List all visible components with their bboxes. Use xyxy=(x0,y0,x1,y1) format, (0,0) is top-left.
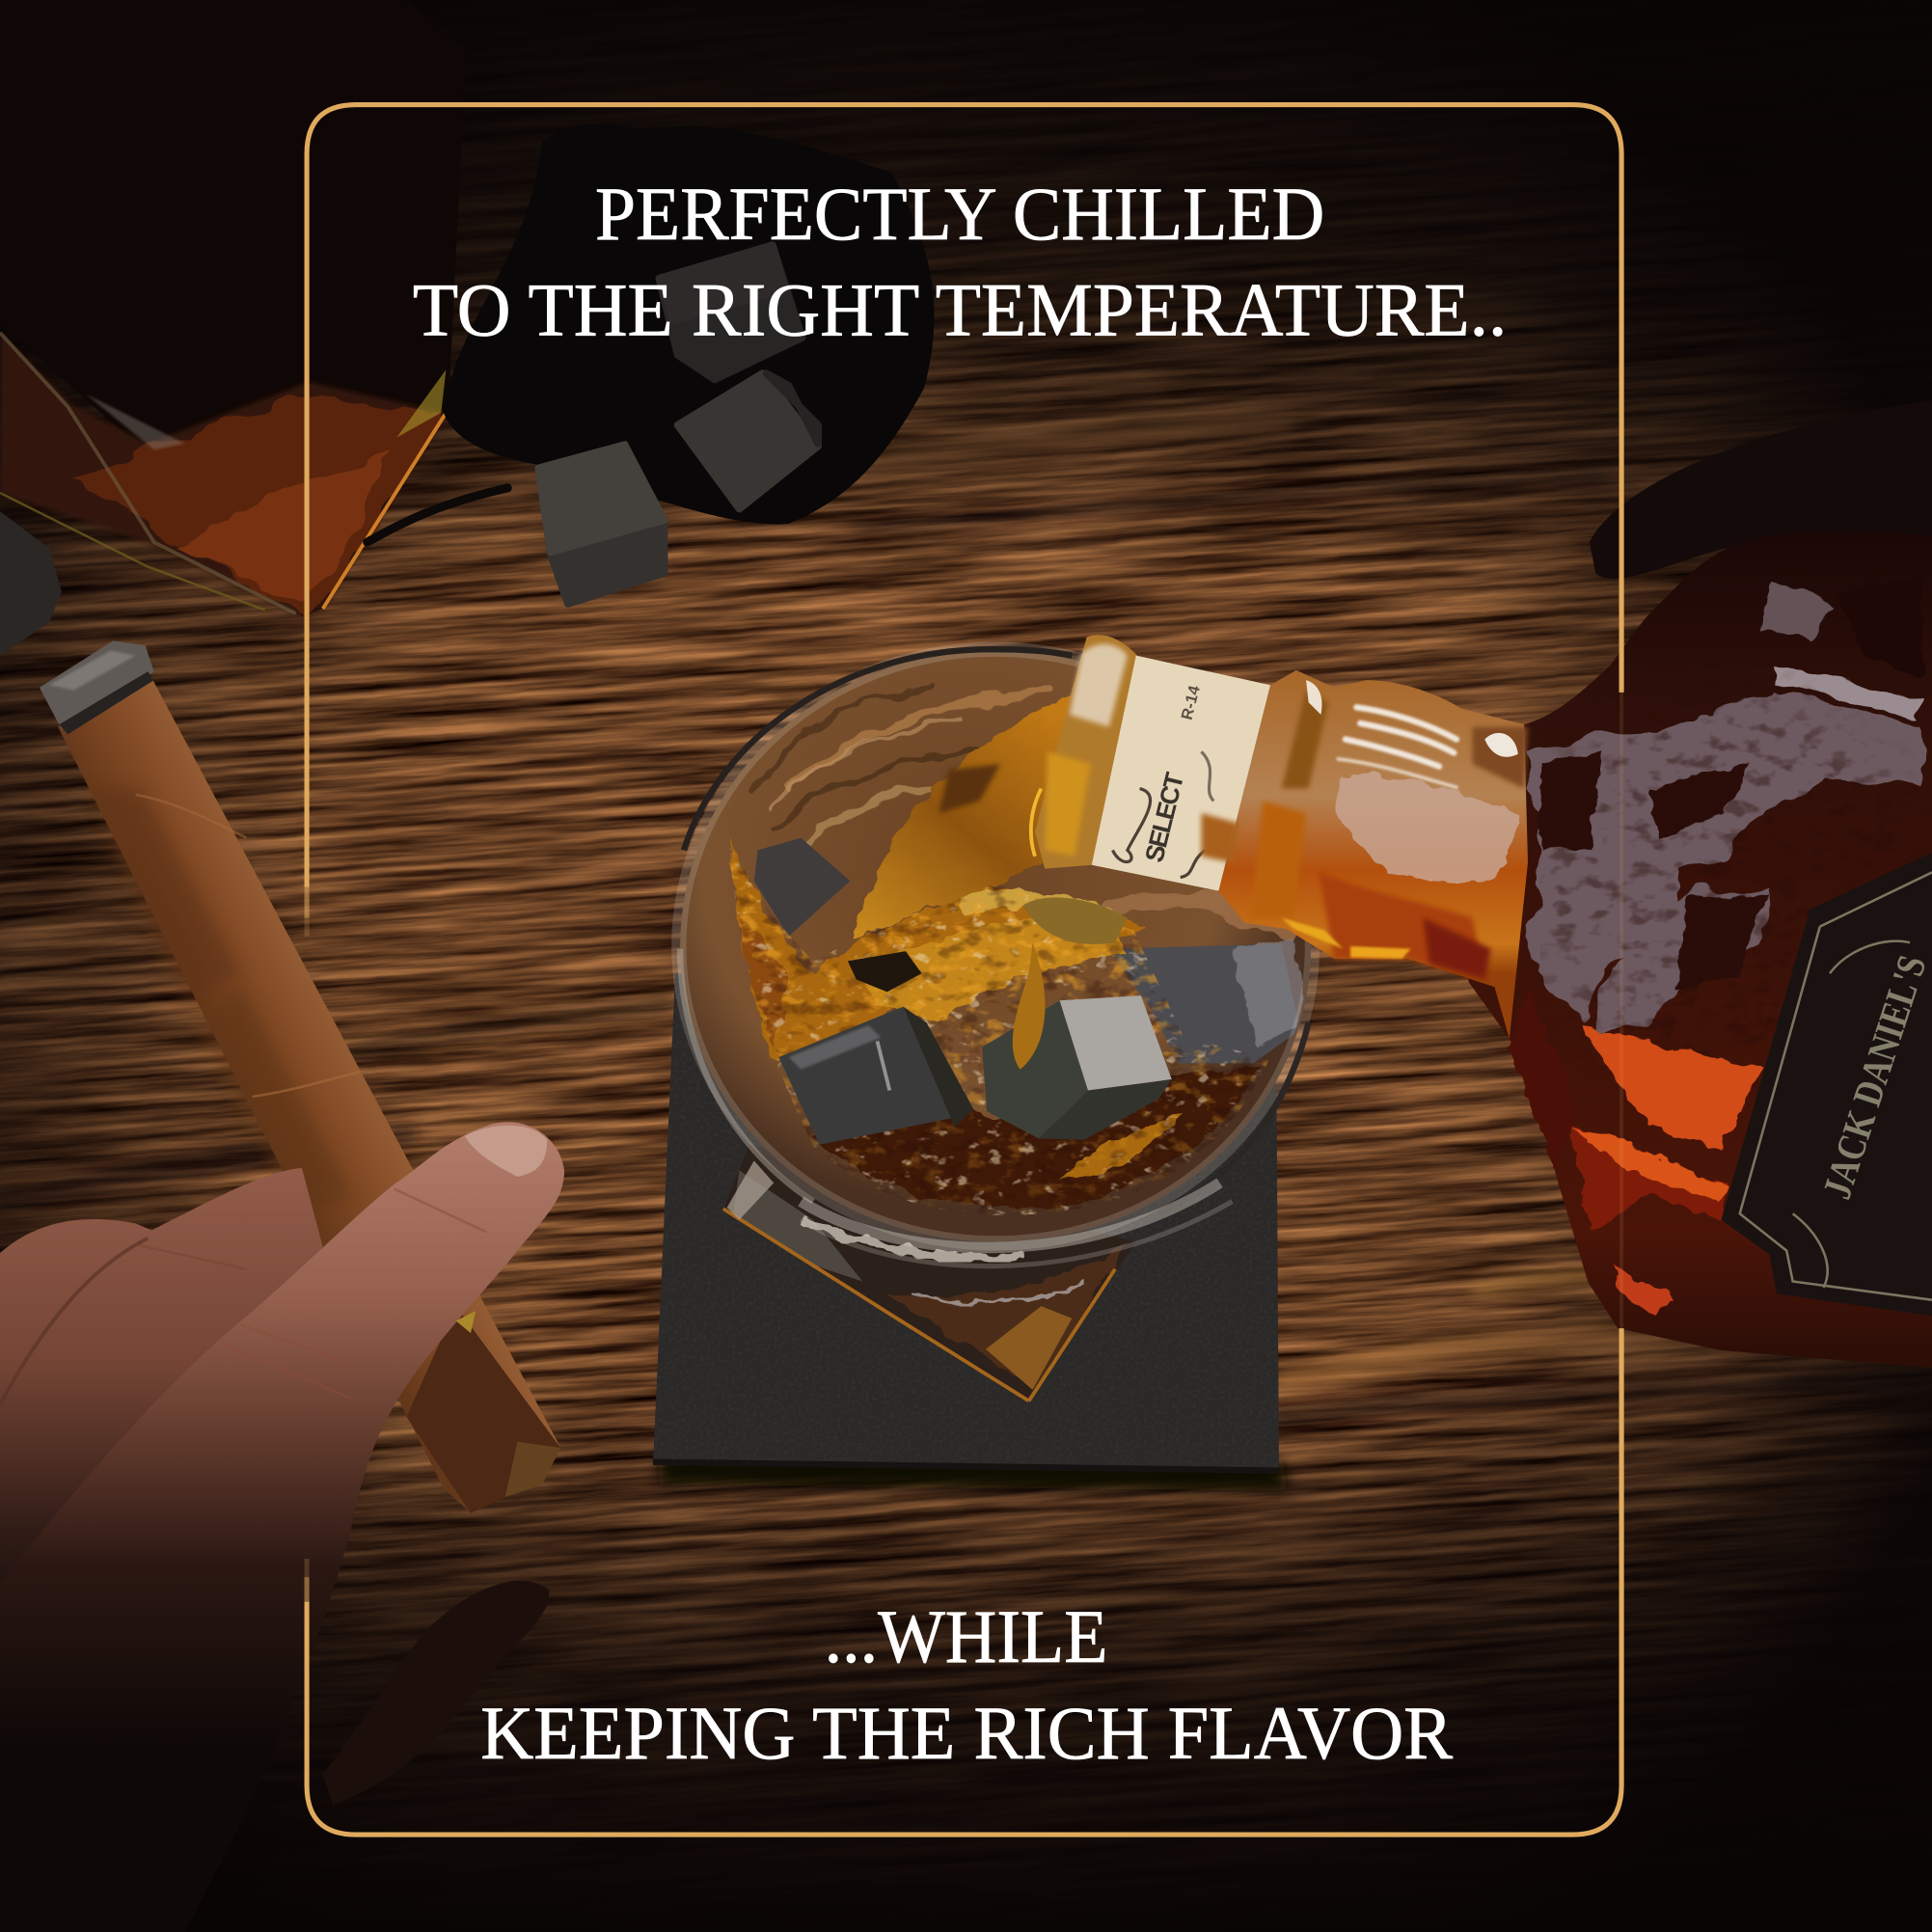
glass base xyxy=(723,1145,1136,1401)
cigar band glint xyxy=(456,1311,476,1333)
glass rim xyxy=(679,649,1312,1266)
lower frame run xyxy=(307,1328,1621,1835)
whisky stone in pouch, middle xyxy=(678,373,818,509)
glass stone left xyxy=(778,1007,973,1145)
mauve glass reflections xyxy=(1528,579,1922,1035)
bottle body xyxy=(1454,531,1932,1368)
whisky pour stream xyxy=(852,694,1128,1070)
black bottle label xyxy=(1722,853,1932,1316)
whisky stone at left edge xyxy=(0,511,62,656)
hand holding the cigar xyxy=(0,1122,564,1932)
dark brown patches in bottle xyxy=(1540,579,1922,992)
whisky glass xyxy=(679,649,1312,1401)
finger at top right holding bottle xyxy=(1590,400,1932,579)
upper frame run xyxy=(307,105,1621,887)
closing line 1: ...WHILE xyxy=(825,1595,1107,1678)
neck of bottle xyxy=(1218,670,1528,1039)
closing line xyxy=(480,1595,1453,1775)
glass stone right xyxy=(982,995,1172,1140)
cream neck label xyxy=(1092,656,1270,891)
orange glow in bottle xyxy=(1510,986,1762,1316)
whisky stone in pouch, upper xyxy=(659,245,803,379)
small stone under pour xyxy=(848,951,922,992)
decanter of whisky, top left xyxy=(0,0,466,616)
grey slate reflections in bowl xyxy=(754,838,1304,1063)
dark whisky pool xyxy=(813,1066,1263,1209)
wood refraction in bowl xyxy=(751,684,1288,937)
neck label text R-14: R-14 xyxy=(1178,683,1204,721)
reflection veins in bottle xyxy=(1479,653,1932,1121)
lower thumb xyxy=(323,1581,549,1805)
whisky stone on table xyxy=(538,445,665,604)
black stone pouch xyxy=(444,123,934,525)
neck label text SELECT: SELECT xyxy=(1139,769,1189,865)
heading line 1: PERFECTLY CHILLED xyxy=(595,173,1324,256)
pouch drawstring xyxy=(367,488,507,542)
heading line 2: TO THE RIGHT TEMPERATURE.. xyxy=(413,268,1507,351)
front finger with nail xyxy=(0,1122,564,1932)
cigar ash tip xyxy=(40,640,154,734)
back fingers xyxy=(0,1168,323,1626)
gold frame border xyxy=(307,105,1621,1835)
veins of light in the whisky xyxy=(729,847,1269,1215)
bowl interior xyxy=(680,650,1311,1242)
bottle mouth xyxy=(1035,635,1137,869)
amber swirl of whisky xyxy=(727,838,1146,1060)
closing line 2: KEEPING THE RICH FLAVOR xyxy=(480,1692,1453,1775)
heading xyxy=(413,173,1507,351)
slate coaster xyxy=(653,973,1288,1491)
whisky bottle xyxy=(1035,531,1932,1368)
cigar xyxy=(58,675,560,1513)
